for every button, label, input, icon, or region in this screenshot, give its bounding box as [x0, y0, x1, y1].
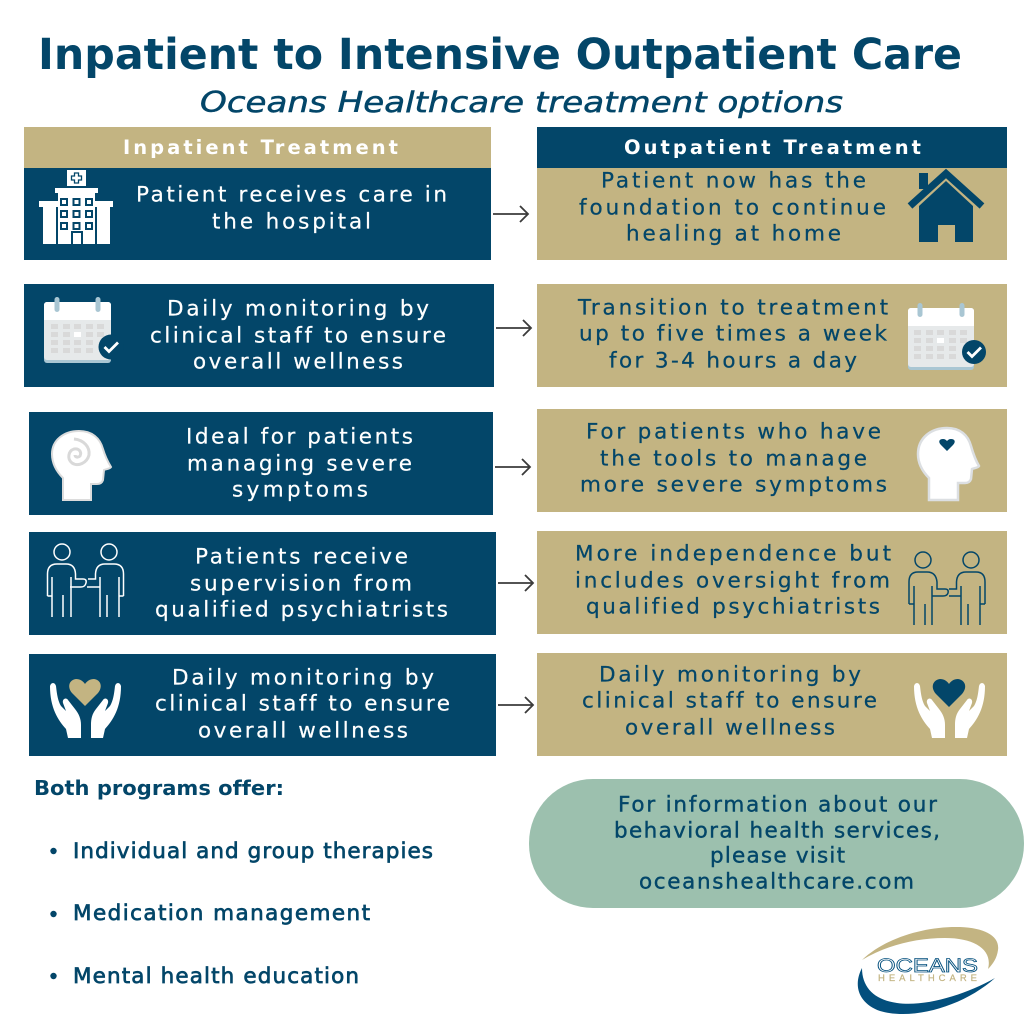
panel: inpatient row 4	[29, 532, 496, 635]
text: transition to treatment: up to five times a week	[579, 321, 888, 346]
text: daily monitoring: overall wellness	[198, 718, 408, 743]
callout: more information	[529, 779, 1024, 908]
icon: head with heart	[918, 428, 979, 500]
panel: inpatient header	[24, 127, 491, 168]
title: Inpatient to Intensive Outpatient Care	[38, 30, 962, 80]
panel: inpatient row 2	[24, 284, 494, 387]
text: daily monitoring: clinical staff to ensure	[150, 323, 446, 348]
panel: outpatient row 1	[537, 168, 1007, 260]
panel: outpatient header: Outpatient Treatment	[624, 136, 921, 159]
text: daily monitoring: Daily monitoring by	[599, 662, 861, 687]
icon: head with spiral	[52, 431, 111, 500]
panel: outpatient row 3	[537, 409, 1007, 512]
panel: inpatient header: Inpatient Treatment	[123, 136, 398, 159]
text: daily monitoring: Daily monitoring by	[167, 296, 429, 321]
text: foundation at home: healing at home	[626, 221, 841, 246]
text: foundation at home	[579, 168, 886, 246]
text: patients with tools: more severe symptoms	[580, 472, 887, 497]
text: patients receive supervision: qualified psychiatrists	[155, 597, 448, 622]
text: daily monitoring	[150, 296, 446, 374]
panel: inpatient row 3	[29, 412, 493, 515]
text: patient receives care	[136, 182, 447, 234]
panel: inpatient row 5	[29, 654, 496, 756]
text: patient receives care: the hospital	[212, 209, 371, 234]
icon: house	[910, 173, 982, 242]
list: shared program offerings	[50, 839, 433, 989]
callout: more information: For information about our	[618, 792, 937, 817]
text: ideal for patients: symptoms	[232, 477, 368, 502]
text: more independence: More independence but	[575, 541, 891, 566]
text: patients receive supervision	[155, 544, 448, 622]
subtitle: Oceans Healthcare treatment options	[200, 86, 843, 119]
panel: outpatient header	[537, 127, 1007, 168]
text: patients with tools	[580, 419, 887, 497]
list: shared program offerings: Individual and group therapies	[73, 839, 433, 864]
panel: outpatient row 4	[537, 531, 1007, 634]
text: daily monitoring	[155, 665, 450, 743]
arrow: row 4	[498, 575, 533, 591]
logo: Oceans Healthcare: OCEANS	[877, 956, 978, 977]
logo: Oceans Healthcare	[858, 927, 998, 1014]
icon: hospital	[39, 170, 113, 244]
text: daily monitoring: clinical staff to ensure	[155, 691, 450, 716]
logo: Oceans Healthcare: HEALTHCARE	[878, 973, 977, 984]
text: patients with tools: the tools to manage	[600, 446, 867, 471]
text: more independence: qualified psychiatrists	[586, 594, 880, 619]
text: patients receive supervision: supervision from	[190, 571, 412, 596]
icon: calendar with check	[908, 303, 986, 370]
text: foundation at home: foundation to continue	[579, 195, 886, 220]
text: patient receives care: Patient receives care in	[136, 182, 447, 207]
text: daily monitoring	[582, 662, 877, 740]
text: patients with tools: For patients who have	[586, 419, 881, 444]
arrow: row 2	[496, 320, 531, 336]
icon: hands with navy heart	[914, 679, 985, 738]
list: shared program offerings: Medication management	[73, 901, 370, 926]
text: patients receive supervision: Patients receive	[195, 544, 408, 569]
text: ideal for patients: Ideal for patients	[186, 424, 413, 449]
text: daily monitoring: overall wellness	[193, 349, 403, 374]
icon: two people	[48, 544, 124, 617]
arrow: row 5	[498, 697, 533, 713]
callout: more information: behavioral health services,	[614, 818, 940, 843]
icon: calendar	[44, 297, 124, 363]
text: more independence	[575, 541, 891, 619]
text: ideal for patients	[186, 424, 413, 502]
text: foundation at home: Patient now has the	[601, 168, 866, 193]
panel: outpatient row 2	[537, 284, 1007, 387]
arrow: row 3	[495, 459, 530, 475]
text: more independence: includes oversight from	[575, 568, 890, 593]
callout: more information: please visit	[710, 843, 845, 868]
text: transition to treatment: for 3-4 hours a day	[609, 348, 857, 373]
text: transition to treatment: Transition to treatment	[577, 295, 888, 320]
text: daily monitoring: Daily monitoring by	[172, 665, 434, 690]
text: daily monitoring: clinical staff to ensure	[582, 688, 877, 713]
icon: hands with gold heart	[50, 679, 121, 738]
panel: inpatient row 1	[24, 168, 491, 260]
list: shared program offerings: Mental health education	[73, 964, 359, 989]
icon: two people	[909, 552, 985, 625]
text: ideal for patients: managing severe	[187, 451, 412, 476]
arrow: row 1	[493, 206, 528, 222]
text: transition to treatment	[577, 295, 888, 373]
heading: both programs offer: Both programs offer:	[34, 776, 284, 800]
panel: outpatient row 5	[537, 653, 1007, 756]
text: daily monitoring: overall wellness	[625, 715, 835, 740]
callout: more information: oceanshealthcare.com	[639, 869, 914, 894]
